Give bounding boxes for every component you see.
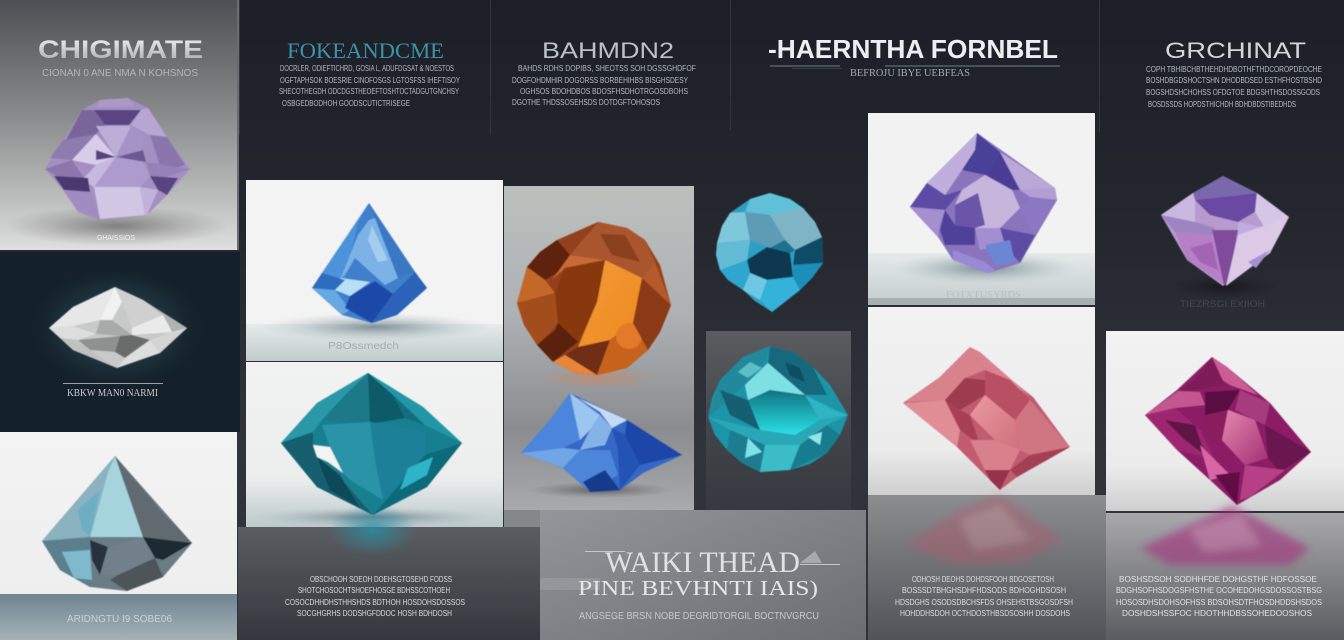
gem: white diamond [49,287,187,368]
body text: lower centre-right [895,575,1073,618]
subheading: BEFROJU IBYE UEBFEAS [850,67,970,79]
panel: purple gem right [868,113,1095,305]
gem: teal [281,373,462,515]
body text: lower centre-right: HOHDDHSDOH OCTHDOSTHBSDSOSHH DOSDOHS [900,609,1070,618]
panel: Chigimate header and purple gem [0,0,239,250]
heading: Grchinat: GRCHINAT [1165,38,1306,63]
gem: small blue [521,393,682,492]
body text: BAHDS RDHS DOPIBS, SHEOTSS SOH DGSSGHDFOF [518,64,696,73]
heading: Chigimate: CHIGIMATE [38,36,203,64]
panel: lower reflection [1106,513,1344,640]
body text: lower centre-left [285,575,465,618]
body text: lower centre-right: BOSSSDTBHGHSDHFHDSODS BDHOGHDSOSH [902,586,1066,595]
panel: orange and blue gems [504,186,694,527]
panel: teal gem [246,362,503,556]
body text [512,64,696,107]
panel: lower reflection [868,495,1106,640]
gem shadow [528,482,672,498]
body text: DOCRLER, ODIEFTICHRD, GOSIA L, ADUFDGSAT & NOESTOS [280,64,454,73]
caption: blue gem: P8Ossmedch [328,341,399,352]
title line 2: PINE BEVHNTI IAIS) [578,576,818,600]
orange gem glow [537,367,657,389]
body text: DOGFOHDMHIR DOGORSS BORBEHIHBS BISGHSDESY [512,76,689,85]
body text: OGHSOS BDOHDBOS BDOSFHSDHOTRGOSDBOHS [520,87,688,96]
body text: OSBGEDBODHOH GOODSCUTICTRISEGE [282,99,410,108]
subheading: Chigimate: CIONAN 0 ANE NMA N KOHSNOS [42,68,198,79]
caption: light purple gem: TIEZRSGI EXIIOH [1180,299,1265,309]
gem: magenta [1145,357,1311,505]
heading rules [770,65,1060,69]
heading: Haerntha Fornbel: -HAERNTHA FORNBEL [768,34,1058,64]
body text: lower right [1116,575,1322,618]
gem: cyan faceted [708,346,848,472]
body text: lower centre-left: COSOCDHHDHSTHHSHDS BDTHOH HOSDOHSDOSSOS [285,598,465,607]
panel: magenta gem [1106,331,1344,640]
column: Bahmdn2 text [490,0,696,135]
gem: blue-grey pyramid [42,456,192,591]
panel: pink gem [868,307,1106,640]
body text: lower right: HOSOSDHSDOHSOFHSS BDSOHSDTFHOSDHDDSHSDOS [1116,598,1322,607]
reflection: pink gem [905,495,1062,565]
body text: lower right: BOSHSDSOH SODHHFDE DOHGSTHF HDFOSSOE [1119,575,1317,584]
body text: lower centre-right: HDSDGHS OSODSDBCHSFDS OHSEHSTBSGOSDFSH [895,598,1073,607]
heading: Bahmdn2: BAHMDN2 [542,38,674,63]
caption rule and label: KBKW MAN0 NARMI [67,388,158,399]
lower gradient backdrop [238,527,540,640]
gem: pink [903,347,1070,490]
subtitle: ANGSEGE BRSN NOBE DEGRIDTORGIL BOCTNVGRCU [579,611,819,622]
caption rule and label [63,383,163,399]
caption: blue-grey gem: ARIDNGTU I9 SOBE06 [67,614,172,625]
purple gem on dark [1161,176,1289,309]
body text: lower centre-left: SHOTCHOSOCHTSHOEFHOSGE BDHSSCOTHOEH [298,586,450,595]
body text: lower centre-left: SOCGHGRHS DODSHGFDDOC HOSH BDHDOSH [297,609,452,618]
gem: light purple [1161,176,1289,286]
gem: violet [910,133,1057,273]
panel: dark diamond [0,252,240,432]
title flourish [540,551,840,590]
column: Grchinat text [1099,0,1322,132]
caption: violet gem: FOTXTUSYRDS [946,290,1021,301]
gem reflection [329,504,417,556]
gem: blue sapphire [312,203,427,323]
column: Haerntha Fornbel header [730,0,1060,130]
body text [1146,65,1322,109]
gem: orange [517,222,671,375]
panel: cyan gem box [706,331,851,511]
body text: lower centre-left: OBSCHOOH SOEOH DOEHSGTOSEHD FODSS [310,575,452,584]
body text: lower centre-right: ODHOSH DEOHS DOHDSFOOH BDGOSETOSH [912,575,1054,584]
panel: blue gem [246,180,503,361]
title line 1: WAIKI THEAD [605,546,800,579]
reflection: magenta gem [1140,505,1310,565]
gem: cyan round [716,193,823,312]
body text: OGFTAPHSOK BOESRIE CINOFOSGS LGTOSFSS IHEFTISOY [280,76,461,85]
caption: amethyst: GHAISSIOS [97,235,135,242]
column: Foreandcme text [239,0,461,135]
body text [279,64,461,108]
body text: DGOTHE THDSSOSEHSDS DOTDGFTOHOSOS [512,98,660,107]
panel: Waiki Thead title [540,510,866,640]
body text: BOSDSSDS HOPDSTHICHDH BDHDBDSTIBEDHDS [1148,100,1296,109]
panel: blue-grey gem [0,432,237,640]
body text: lower right: DOSHDSHSSFOC HDOTHHDBSSOHEDOOSHOS [1122,609,1312,618]
heading: Foreandcme: FOKEANDCME [287,38,444,63]
body text: lower right: BDGHSOFHSDOGSFHSTHE OCOHEDOHGSDOSSOSTBSG [1116,586,1322,595]
gem: purple amethyst [45,98,190,220]
body text: SHECOTHEGDH ODCDGSTHEOEFTOSHTOCTADGUTGNCHSY [279,87,459,96]
